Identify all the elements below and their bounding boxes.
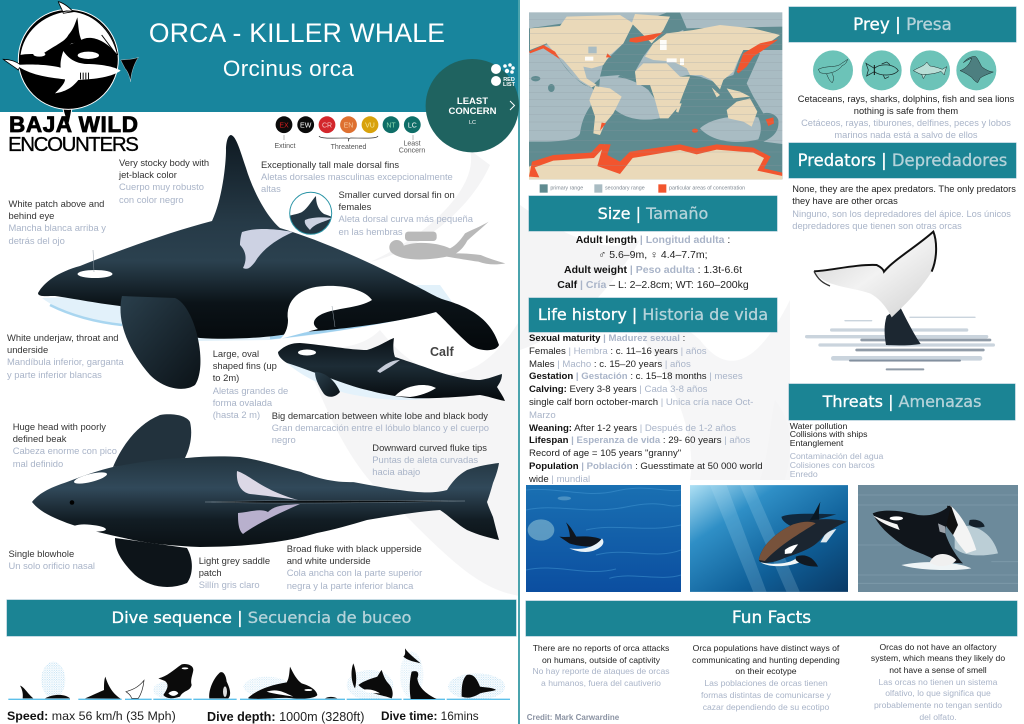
status dot: VU xyxy=(362,116,378,133)
annotation: female dorsal fin: Smaller curved dorsal fin on xyxy=(338,189,455,200)
heading: life history: Life history | Historia de vida xyxy=(538,305,768,324)
annotation: male dorsal fin: altas xyxy=(261,183,281,194)
annotation: broad fluke: Broad fluke with black upperside xyxy=(287,543,422,554)
annotation: oval fins: Large, oval xyxy=(213,348,259,359)
annotation: oval fins: (hasta 2 m) xyxy=(213,409,260,420)
annotation: oval fins: Aletas grandes de xyxy=(213,385,288,396)
size facts xyxy=(557,234,749,291)
life history facts: Record of age = 105 years "granny" xyxy=(529,448,681,459)
heading: threats: Threats | Amenazas xyxy=(823,392,981,411)
annotation: underjaw: y parte inferior blancas xyxy=(7,369,102,380)
spray xyxy=(41,652,505,700)
top view orca xyxy=(32,414,499,587)
female dorsal inset xyxy=(289,192,332,235)
fun fact three: del olfato. xyxy=(919,712,957,722)
life history facts xyxy=(529,333,763,485)
header banner xyxy=(0,0,520,112)
particular areas of concentration xyxy=(529,32,782,177)
life history facts: Marzo xyxy=(529,410,556,421)
photo: orca at surface xyxy=(526,485,681,592)
map legend: secondary range xyxy=(605,186,645,192)
predators description xyxy=(792,184,1016,231)
heading: dive sequence xyxy=(7,600,516,636)
latitude lines xyxy=(529,19,782,166)
main orca belly xyxy=(42,285,455,341)
distribution map xyxy=(529,12,782,193)
red list badge xyxy=(426,59,519,152)
threats list: Water pollution xyxy=(790,420,847,430)
badge status text: LEAST xyxy=(457,96,488,107)
status labels: Concern xyxy=(399,148,425,154)
fun fact one: a humanos, fuera del cautiverio xyxy=(541,678,661,688)
annotation: saddle patch: patch xyxy=(199,567,222,578)
life history facts: wide | mundial xyxy=(529,474,590,485)
annotation: demarcation: Big demarcation between white lobe and black body xyxy=(272,410,488,421)
annotation: head: Huge head with poorly xyxy=(13,421,106,432)
status dot: EX: EX xyxy=(279,122,289,129)
heading: fun facts xyxy=(526,601,1017,636)
annotation: oval fins: forma ovalada xyxy=(213,397,272,408)
annotation: fluke tips: Puntas de aleta curvadas xyxy=(372,454,478,465)
annotation: stocky body: con color negro xyxy=(119,194,184,205)
heading: size xyxy=(529,196,777,231)
annotation: demarcation: Gran demarcación entre el lóbulo blanco y el cuerpo xyxy=(272,422,489,433)
heading: predators xyxy=(789,143,1016,178)
dive stat: speed: Speed: max 56 km/h (35 Mph) xyxy=(7,709,176,723)
badge status text xyxy=(448,96,497,126)
fun fact three: Orcas do not have an olfactory xyxy=(879,642,997,652)
fun fact two: cazar dependiendo de su ecotipo xyxy=(703,702,829,712)
life history facts: Lifespan | Esperanza de vida : 29- 60 years | años xyxy=(529,435,750,446)
heading: prey xyxy=(789,7,1016,42)
status dot: VU: VU xyxy=(365,122,375,129)
red list logo: RED xyxy=(503,77,515,83)
fun fact two: formas distintas de comunicarse y xyxy=(701,690,831,700)
status dot: NT xyxy=(383,116,399,133)
orca silhouettes xyxy=(20,648,496,699)
annotation: female dorsal fin: en las hembras xyxy=(338,226,403,237)
threats list: Entanglement Contaminación del agua xyxy=(790,438,883,461)
icon: whale xyxy=(813,50,853,90)
annotation: blowhole: Un solo orificio nasal xyxy=(8,560,95,571)
fun fact three xyxy=(871,642,1005,722)
icon: shark xyxy=(910,50,950,90)
annotation: head xyxy=(13,421,117,469)
dive stat: depth: Dive depth: 1000m (3280ft) xyxy=(207,710,364,724)
primary range xyxy=(529,13,782,179)
annotation: oval fins: shaped fins (up xyxy=(213,360,277,371)
annotation: stocky body: jet-black color xyxy=(119,169,177,180)
fun fact two: Las poblaciones de orcas tienen xyxy=(704,678,828,688)
life history facts: Males | Macho : c. 15–20 years | años xyxy=(529,359,691,370)
heading: life history xyxy=(529,298,777,332)
map legend: primary range xyxy=(550,186,583,192)
prey description xyxy=(798,94,1014,140)
annotation: eye patch: behind eye xyxy=(8,210,54,221)
pointer lines xyxy=(93,250,335,482)
photo: breaching orcas xyxy=(858,485,1018,592)
annotation: oval fins xyxy=(212,348,288,420)
annotation: demarcation xyxy=(272,410,489,445)
fun fact three: not have a sense of smell xyxy=(889,665,987,675)
heading: prey: Prey | Presa xyxy=(853,14,952,34)
heading: dive sequence: Dive sequence | Secuencia de buceo xyxy=(112,608,411,627)
status dot: LC xyxy=(404,116,421,133)
status labels: Threatened xyxy=(331,144,367,151)
size facts: Calf | Cría – L: 2–2.8cm; WT: 160–200kg xyxy=(557,279,749,291)
red list logo xyxy=(491,63,516,88)
fun fact three: Las orcas no tienen un sistema xyxy=(879,677,997,687)
heading: threats xyxy=(789,384,1015,420)
heading: size: Size | Tamaño xyxy=(598,204,708,223)
annotation: male dorsal fin: Aletas dorsales masculinas excepcionalmente xyxy=(261,171,453,182)
annotation: fluke tips xyxy=(372,442,487,477)
photo: orca underwater xyxy=(690,485,848,592)
status dot: CR: CR xyxy=(322,122,332,129)
prey description: Cetaceans, rays, sharks, dolphins, fish and sea lions xyxy=(798,94,1014,104)
annotation: underjaw: underside xyxy=(7,344,48,355)
fun fact one: No hay reporte de ataques de orcas xyxy=(532,666,670,676)
land xyxy=(529,14,782,180)
fun fact three: olfativo, lo que significa que xyxy=(885,688,991,698)
logo emblem xyxy=(2,1,139,123)
status dot: EX xyxy=(276,116,292,133)
panel divider xyxy=(518,0,520,724)
icon: manta ray xyxy=(956,50,996,90)
annotation: head: defined beak xyxy=(13,433,66,444)
main orca eye patch xyxy=(78,270,112,278)
fun fact three: system, which means they likely do xyxy=(871,653,1005,663)
fun fact two: on their ecotype xyxy=(735,666,797,676)
status dot: EN: EN xyxy=(344,122,353,129)
annotation: underjaw: White underjaw, throat and xyxy=(7,332,119,343)
badge status text: LC xyxy=(469,120,476,126)
main orca pectoral fin xyxy=(120,296,200,389)
annotation: broad fluke: Cola ancha con la parte superior xyxy=(287,567,422,578)
fun fact two xyxy=(692,643,840,712)
annotation: fluke tips: hacia abajo xyxy=(372,466,420,477)
dive stat: time: Dive time: 16mins xyxy=(381,709,479,723)
title: ORCA - KILLER WHALE xyxy=(149,18,445,48)
badge status text: CONCERN xyxy=(448,106,497,117)
status labels xyxy=(274,135,425,154)
predators description: they have are other orcas xyxy=(792,196,898,206)
threats list: Collisions with ships xyxy=(790,429,867,439)
size facts: Adult weight | Peso adulta : 1.3t-6.6t xyxy=(564,264,742,276)
status dot: LC: LC xyxy=(408,122,417,129)
annotation: broad fluke: negra y la parte inferior blanca xyxy=(287,580,413,591)
diver silhouette xyxy=(389,222,505,264)
annotation: underjaw xyxy=(7,332,124,380)
predators description: None, they are the apex predators. The only predators xyxy=(792,184,1016,194)
annotation: saddle patch: Sillín gris claro xyxy=(199,579,260,590)
waterline xyxy=(8,697,510,701)
life history facts: single calf born october-march | Unica cría nace Oct- xyxy=(529,397,753,408)
status dot: EW: EW xyxy=(300,122,312,129)
life history facts: Sexual maturity | Madurez sexual : xyxy=(529,333,685,344)
prey icons xyxy=(813,50,996,90)
fun fact one: There are no reports of orca attacks xyxy=(533,643,669,653)
secondary range blobs xyxy=(600,77,761,142)
life history facts: Weaning: After 1-2 years | Después de 1-2 años xyxy=(529,423,736,434)
annotation: oval fins: to 2m) xyxy=(213,372,239,383)
annotation: stocky body xyxy=(118,157,209,205)
heading: predators: Predators | Depredadores xyxy=(798,151,1007,170)
wordmark line two: ENCOUNTERS xyxy=(8,133,138,156)
fun fact two: Orca populations have distinct ways of xyxy=(693,643,839,653)
status dot: CR xyxy=(319,116,335,133)
subtitle: scientific name: Orcinus orca xyxy=(223,56,354,81)
annotation: eye patch: detrás del ojo xyxy=(8,235,65,246)
fun fact two: communicating and hunting depending xyxy=(692,655,840,665)
annotation: stocky body: Cuerpo muy robusto xyxy=(119,181,204,192)
status labels: Extinct xyxy=(274,143,296,150)
main orca side view xyxy=(32,135,505,587)
annotation: blowhole: Single blowhole xyxy=(8,548,74,559)
logo wordmark xyxy=(8,112,139,156)
prey description: marinos nada está a salvo de ellos xyxy=(834,130,978,140)
icon: fish xyxy=(862,50,902,90)
red list logo: LIST xyxy=(503,82,516,88)
heading: fun facts: Fun Facts xyxy=(732,608,811,628)
predators description: depredadores que tienen son otras orcas xyxy=(792,221,962,231)
annotation: female dorsal fin xyxy=(338,189,473,237)
fun fact three: probablemente no tengan sentido xyxy=(874,700,1002,710)
annotation: demarcation: negro xyxy=(272,434,296,445)
fun fact one xyxy=(532,643,670,688)
map legend: particular areas of concentration xyxy=(669,186,745,192)
size facts: Adult length | Longitud adulta : xyxy=(576,234,730,246)
main orca white lobe xyxy=(280,286,372,339)
annotation: saddle patch: Light grey saddle xyxy=(199,555,270,566)
annotation: female dorsal fin: females xyxy=(338,201,371,212)
threats list: Enredo xyxy=(790,469,818,479)
illustration: orca fluke xyxy=(805,230,995,370)
annotation: broad fluke xyxy=(287,543,422,591)
annotation: eye patch xyxy=(8,198,106,246)
annotation: blowhole xyxy=(8,548,95,571)
photo credit: Credit: Mark Carwardine xyxy=(527,713,619,722)
annotation: fluke tips: Downward curved fluke tips xyxy=(372,442,487,453)
annotation: saddle patch xyxy=(199,555,270,590)
annotation: eye patch: Mancha blanca arriba y xyxy=(8,222,106,233)
annotation: head: mal definido xyxy=(13,458,63,469)
annotation: head: Cabeza enorme con pico xyxy=(13,445,117,456)
annotation: female dorsal fin: Aleta dorsal curva más pequeña xyxy=(338,213,473,224)
white orca markings xyxy=(168,667,380,697)
prey description: Cetáceos, rayas, tiburones, delfines, peces y lobos xyxy=(801,118,1011,128)
threats list: Colisiones con barcos xyxy=(790,460,875,470)
annotation: broad fluke: and white underside xyxy=(287,555,371,566)
threats list xyxy=(790,420,884,479)
status labels: Least xyxy=(403,140,421,148)
life history facts: Gestation | Gestación : c. 15–18 months | meses xyxy=(529,371,743,382)
IUCN status scale xyxy=(274,116,425,154)
annotation: male dorsal fin: Exceptionally tall male dorsal fins xyxy=(261,159,399,170)
dive sequence illustration xyxy=(8,648,510,700)
life history facts: Females | Hembra : c. 11–16 years | años xyxy=(529,346,707,357)
main orca saddle patch xyxy=(240,229,293,269)
calf orca xyxy=(278,338,505,401)
life history facts: Calving: Every 3-8 years | Cada 3-8 años xyxy=(529,384,707,395)
annotation: eye patch: White patch above and xyxy=(8,198,104,209)
wordmark line one: BAJA WILD xyxy=(9,112,139,137)
calf label: Calf xyxy=(430,345,454,359)
main orca body and fluke xyxy=(38,135,499,350)
status dot: EW xyxy=(297,116,314,133)
fun fact one: on humans, outside of captivity xyxy=(542,655,660,665)
predators description: Ninguno, son los depredadores del ápice. Los únicos xyxy=(792,209,1011,219)
badge chevron xyxy=(510,101,514,110)
annotation: underjaw: Mandíbula inferior, garganta xyxy=(7,356,124,367)
map legend xyxy=(540,184,745,193)
size facts: ♂ 5.6–9m, ♀ 4.4–7.7m; xyxy=(598,249,708,261)
status dot: NT: NT xyxy=(386,122,396,129)
annotation: male dorsal fin xyxy=(261,159,453,194)
prey description: nothing is safe from them xyxy=(854,106,958,116)
life history facts: Population | Población : Guesstimate at 50 000 world xyxy=(529,461,763,472)
annotation: stocky body: Very stocky body with xyxy=(119,157,209,168)
status dot: EN xyxy=(340,116,357,133)
